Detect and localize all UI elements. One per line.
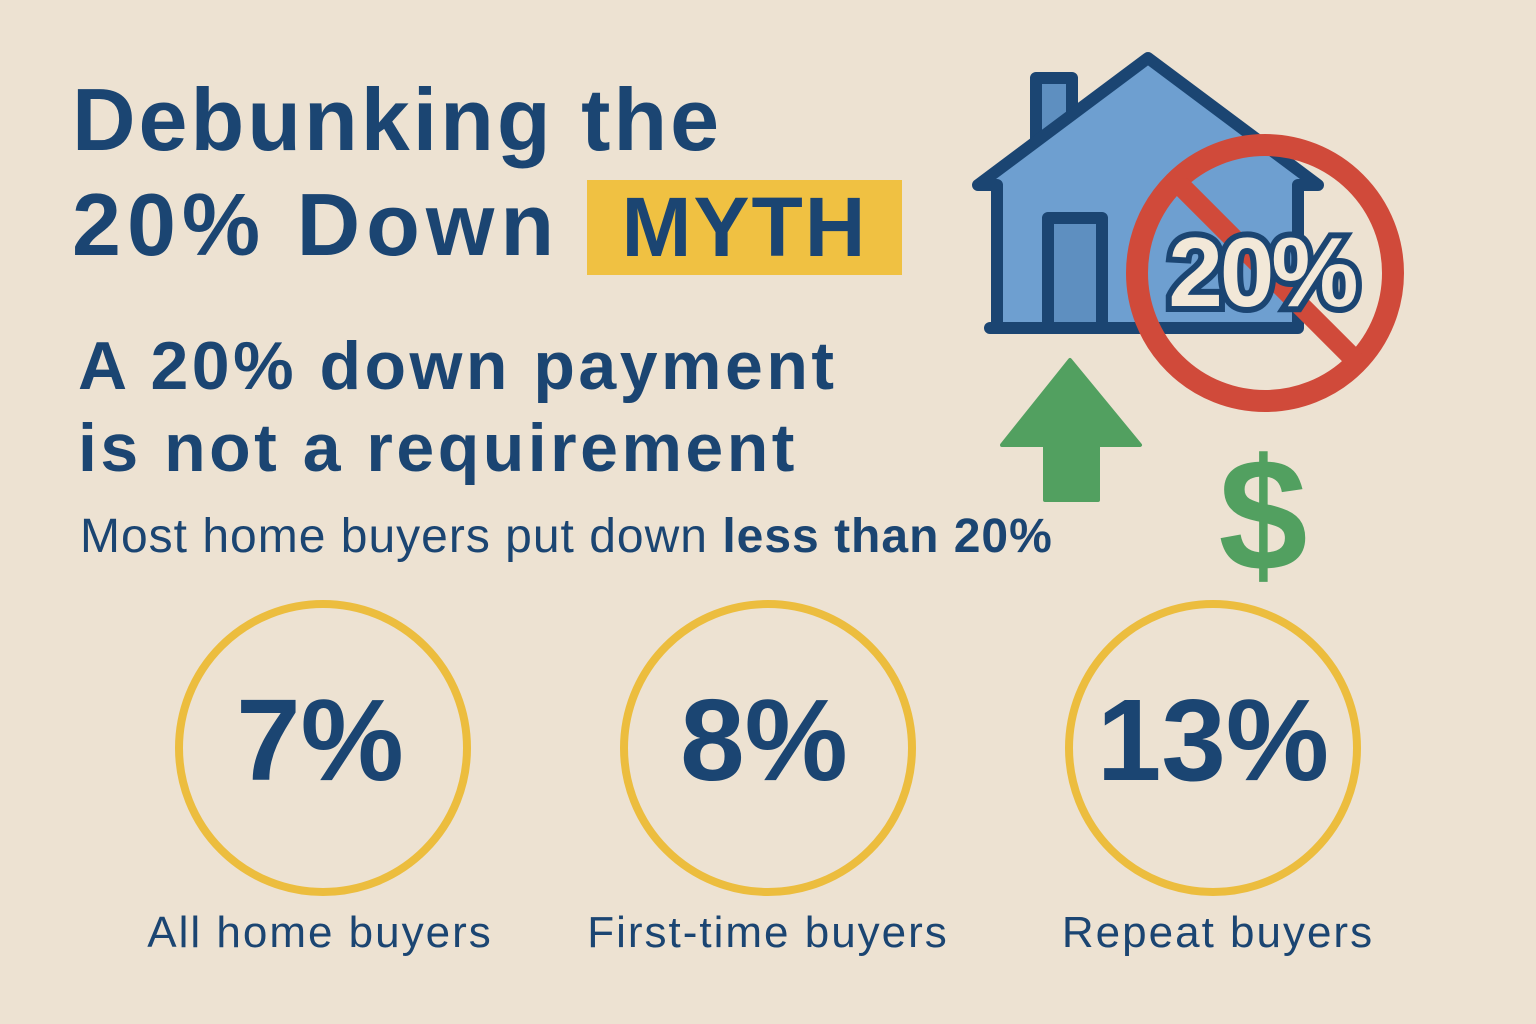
stat: all home buyers: 7% <box>236 675 404 805</box>
icon: no 20% sign: 20% <box>1168 217 1356 327</box>
stat: all home buyers <box>147 600 493 957</box>
subtitle: is not a requirement <box>78 410 798 486</box>
supporting text: Most home buyers put down less than 20% <box>80 510 1053 563</box>
icon: no 20% sign <box>1137 145 1393 401</box>
subtitle <box>78 328 838 486</box>
stat: repeat buyers <box>1062 600 1374 957</box>
stat: all home buyers: All home buyers <box>147 908 493 957</box>
stat: repeat buyers: 13% <box>1097 675 1329 805</box>
subtitle: A 20% down payment <box>78 328 838 404</box>
icon: house <box>978 58 1318 328</box>
stat: first-time buyers: 8% <box>680 675 848 805</box>
illustration: house with no-20% sign <box>972 52 1404 600</box>
stat: repeat buyers: Repeat buyers <box>1062 908 1374 957</box>
icon: dollar sign: $ <box>1219 425 1307 600</box>
stat: first-time buyers <box>587 600 949 957</box>
title <box>72 70 902 275</box>
title line 1: Debunking the <box>72 70 722 169</box>
icon: green up arrow <box>1002 360 1140 500</box>
stat: first-time buyers: First-time buyers <box>587 908 949 957</box>
title line 2: 20% Down <box>72 175 560 274</box>
myth highlight: MYTH <box>622 180 867 274</box>
